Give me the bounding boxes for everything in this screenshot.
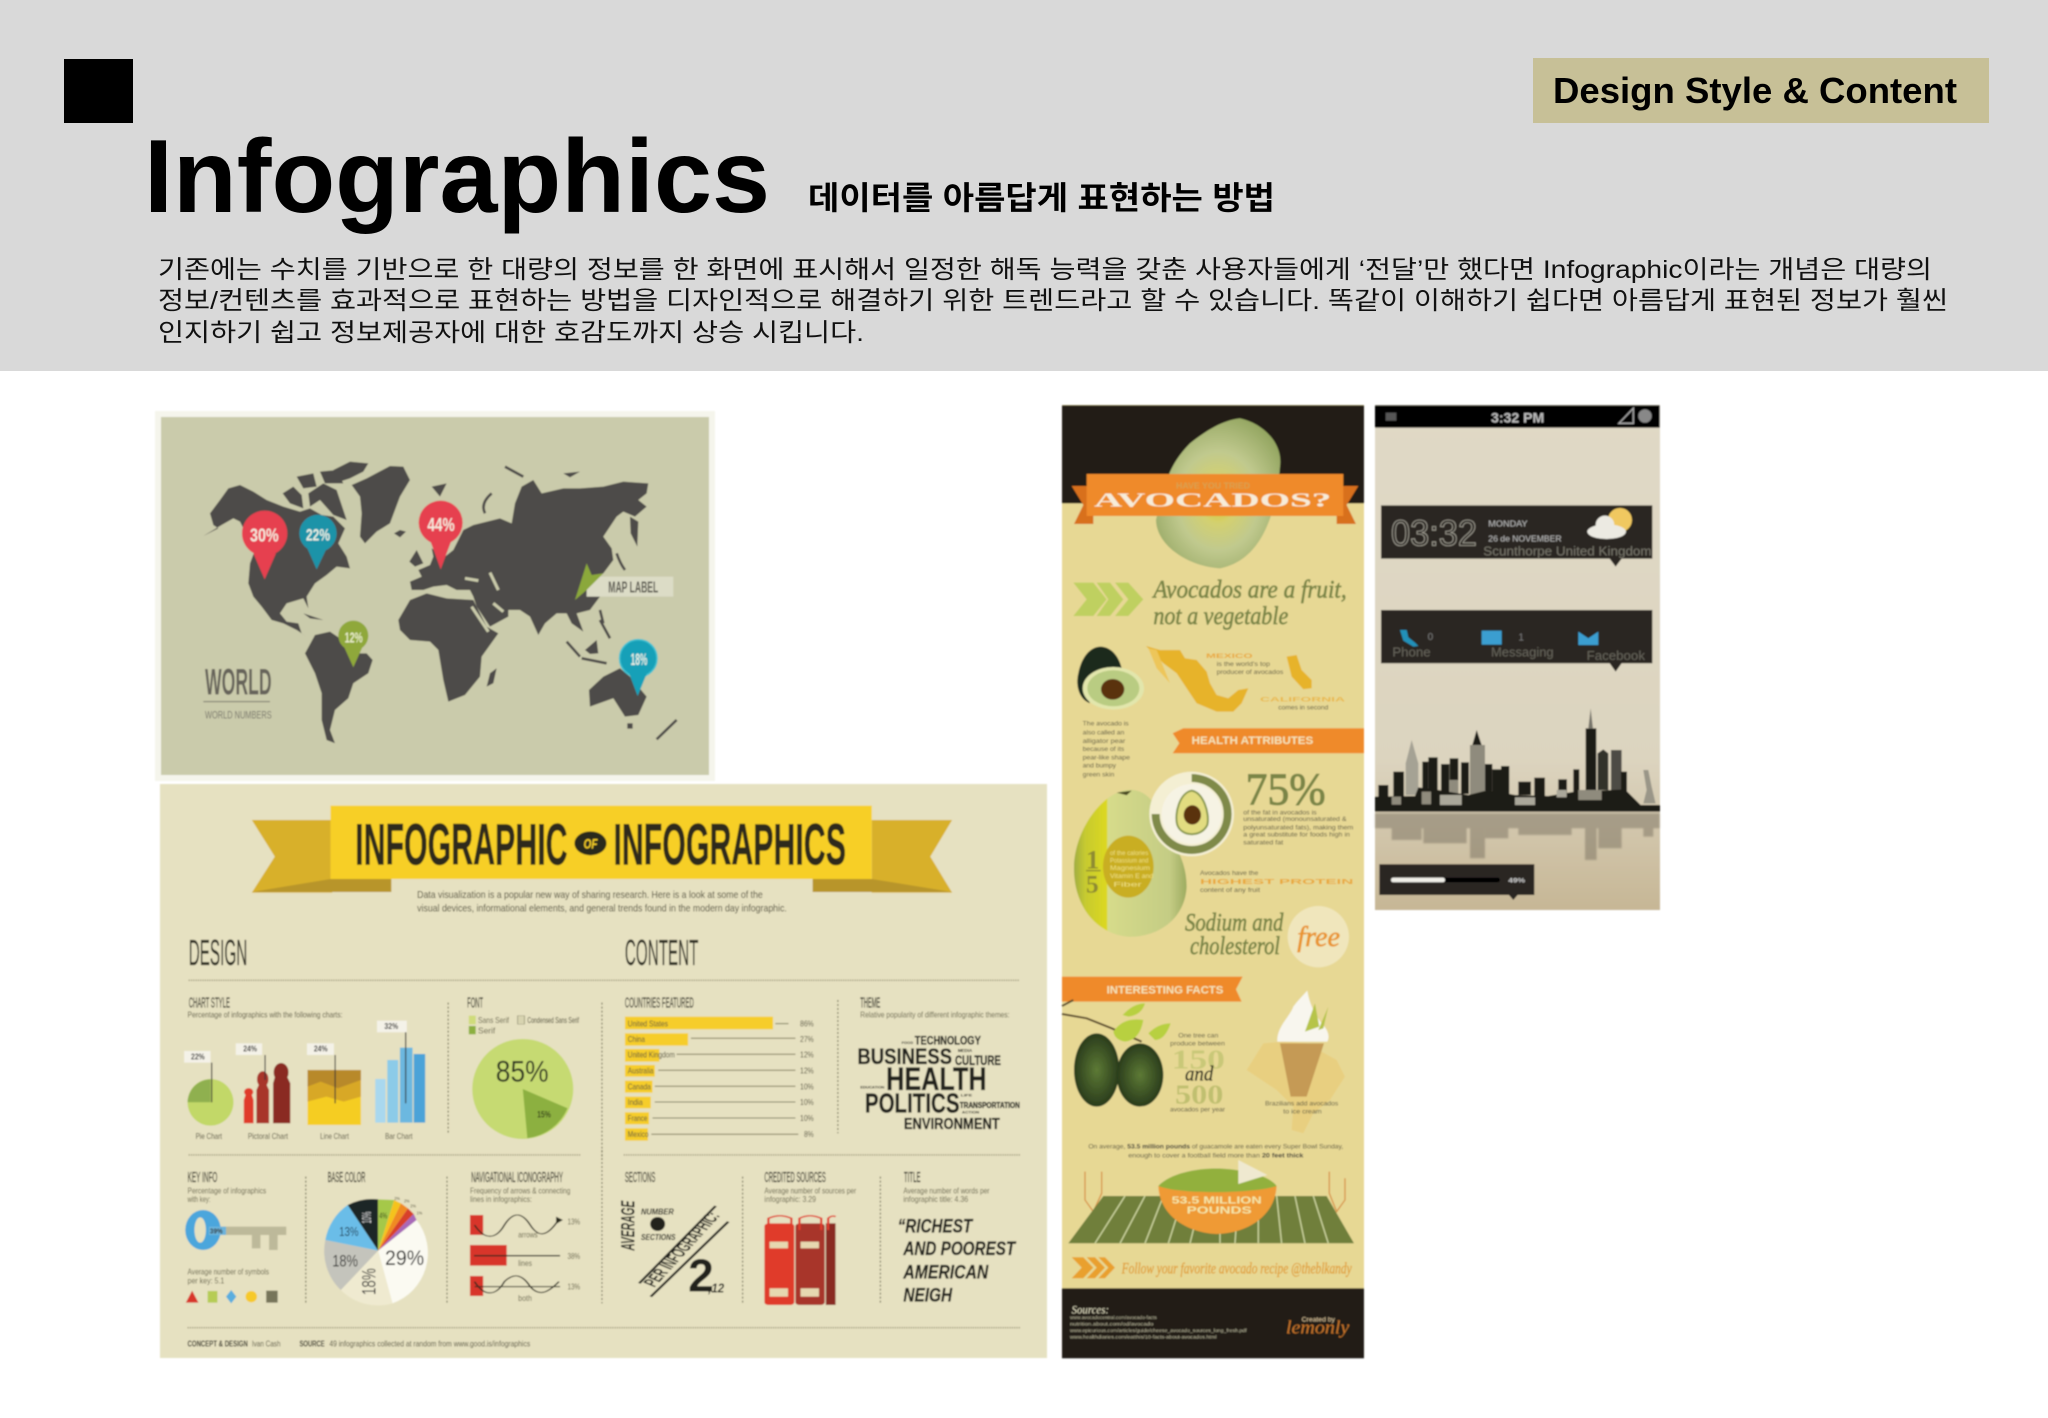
theme word cloud: ENVIRONMENT xyxy=(904,1115,1000,1133)
theme word cloud: POLITICS xyxy=(865,1088,960,1119)
key info block: Percentage of infographics xyxy=(188,1187,266,1195)
bar chart sample: Bar Chart xyxy=(385,1133,413,1141)
interesting facts banner: INTERESTING FACTS xyxy=(1107,985,1224,997)
dark avocado xyxy=(1077,647,1144,710)
ribbon banner: OF xyxy=(584,836,598,852)
avocados banner: AVOCADOS? xyxy=(1094,490,1331,512)
base color pie: 13% xyxy=(339,1224,359,1239)
75 percent ring xyxy=(1149,772,1234,856)
clock widget: 03:32 xyxy=(1391,512,1477,553)
sodium heading xyxy=(1185,909,1284,960)
panel: infographic of infographics: 38% xyxy=(568,1253,580,1261)
pie chart sample xyxy=(184,1051,233,1141)
intro text block: 인지하기 쉽고 정보제공자에 대한 호감도까지 상승 시킵니다. xyxy=(158,319,864,347)
75 percent text: unsaturated (monounsaturated & xyxy=(1243,817,1347,823)
shortcuts widget: Facebook xyxy=(1587,649,1646,663)
shortcuts widget: 0 xyxy=(1428,632,1434,643)
key info block: per key: 5.1 xyxy=(188,1277,224,1285)
base color pie: 2% xyxy=(404,1199,410,1204)
panel: infographic of infographics: Average number of sources per xyxy=(764,1187,856,1195)
theme word cloud: FOOD xyxy=(902,1041,913,1045)
avocado yield stats: avocados per year xyxy=(1170,1108,1225,1114)
countries featured bars: COUNTRIES FEATURED xyxy=(625,995,694,1011)
alligator pear note: also called an xyxy=(1083,730,1124,736)
pin 18% xyxy=(620,640,657,696)
panel: infographic of infographics: 13% xyxy=(568,1218,580,1227)
protein note: HIGHEST PROTEIN xyxy=(1200,877,1353,886)
big avocado slice: 5 xyxy=(1086,870,1099,898)
panel: infographic of infographics: NAVIGATIONAL ICONOGRAPHY xyxy=(471,1169,563,1186)
pie chart sample: 22% xyxy=(191,1053,205,1061)
title length block: NEIGH xyxy=(903,1284,953,1306)
theme word cloud: HEALTH xyxy=(886,1060,987,1097)
brazil and ice cream: Brazilians add avocados xyxy=(1265,1102,1338,1108)
countries featured bars: United States xyxy=(628,1020,668,1028)
navigational iconography block xyxy=(470,1169,580,1303)
pictorial chart sample xyxy=(236,1043,290,1141)
font pie chart: Sans Serif xyxy=(478,1017,510,1025)
status bar xyxy=(1375,405,1660,428)
countries featured bars: Mexico xyxy=(628,1131,648,1139)
panel: infographic of infographics: 12% xyxy=(800,1067,814,1076)
intro copy: visual devices, informational elements, and general trends found in the modern day infographic. xyxy=(417,902,787,913)
alligator pear note xyxy=(1083,722,1131,778)
header band xyxy=(0,0,2048,371)
big avocado slice: Potassium and xyxy=(1110,859,1148,865)
navigational iconography block: lines in infographics: xyxy=(470,1196,532,1204)
panel: infographic of infographics: AND POOREST xyxy=(903,1237,1017,1259)
big avocado slice: Magnesium xyxy=(1110,866,1150,872)
map label callout: MAP LABEL xyxy=(608,579,658,596)
panel: infographic of infographics: 10% xyxy=(800,1115,814,1123)
intro copy xyxy=(417,889,787,913)
footer credits: SOURCE xyxy=(299,1339,325,1349)
battery widget xyxy=(1379,864,1534,900)
title length block: Average number of words per xyxy=(903,1187,990,1195)
theme word cloud: TECHNOLOGY xyxy=(915,1034,981,1047)
avocado half xyxy=(1156,418,1280,568)
bar chart sample xyxy=(375,1021,425,1141)
avocados banner xyxy=(1072,474,1358,524)
world heading xyxy=(203,660,272,722)
clock widget: Scunthorpe United Kingdom xyxy=(1483,545,1652,559)
base color pie xyxy=(324,1169,428,1305)
line chart sample: 24% xyxy=(314,1045,328,1054)
panel: infographic of infographics: 12% xyxy=(800,1051,814,1060)
health attributes banner xyxy=(1173,728,1364,753)
dark footer with sources: www.avocadocentral.com/avocado-facts xyxy=(1070,1315,1157,1320)
clock widget xyxy=(1381,505,1652,567)
americas and greenland xyxy=(203,462,410,743)
theme word cloud: THEME xyxy=(860,995,880,1011)
pie chart sample: Pie Chart xyxy=(196,1133,222,1141)
super bowl fact: On average, 53.5 million pounds of guacamole are eaten every Super Bowl Sunday, xyxy=(1088,1145,1344,1151)
big avocado slice: Fiber xyxy=(1113,883,1142,889)
sections block: PER INFOGRAPHIC: xyxy=(639,1210,725,1289)
alligator pear note: because of its xyxy=(1083,747,1124,753)
big avocado slice: Vitamin E and xyxy=(1110,874,1153,880)
base color pie: 18% xyxy=(332,1252,358,1270)
panel: infographic of infographics: Condensed Sans Serif xyxy=(527,1017,579,1025)
avocado yield stats: 150 xyxy=(1172,1044,1225,1074)
base color pie: 29% xyxy=(385,1247,424,1270)
alligator pear note: and bumpy xyxy=(1083,764,1116,770)
clock widget: MONDAY xyxy=(1488,520,1528,529)
dark footer with sources: Sources: xyxy=(1072,1302,1109,1316)
city skyline xyxy=(1375,708,1660,812)
title length block: AMERICAN xyxy=(903,1261,989,1283)
mexico and california shapes: comes in second xyxy=(1278,705,1328,711)
panel: infographic of infographics: 10% xyxy=(800,1083,814,1091)
countries featured bars: China xyxy=(628,1036,645,1044)
base color pie: 10% xyxy=(361,1212,375,1223)
clock widget: 26 de NOVEMBER xyxy=(1488,535,1562,544)
shortcuts widget: Messaging xyxy=(1491,646,1554,660)
subtitle: 데이터를 아름답게 표현하는 방법 xyxy=(808,180,1275,216)
football field with guacamole bowl: POUNDS xyxy=(1187,1205,1252,1216)
intro text block: 정보/컨텐츠를 효과적으로 표현하는 방법을 디자인적으로 해결하기 위한 트렌드라고 할 수 있습니다. 똑같이 이해하기 쉽다면 아름답게 표현된 정보가 훨씬 xyxy=(158,287,1948,315)
countries featured bars: France xyxy=(628,1115,647,1123)
shortcuts widget: 1 xyxy=(1518,633,1524,644)
football field with guacamole bowl xyxy=(1068,1160,1354,1243)
font pie chart: 15% xyxy=(537,1109,551,1120)
alligator pear note: The avocado is xyxy=(1083,722,1129,728)
panel: infographic of infographics: CONTENT xyxy=(625,932,698,973)
brazil and ice cream xyxy=(1247,991,1345,1133)
free badge: free xyxy=(1297,922,1340,953)
pin 44% xyxy=(419,501,463,569)
dark footer with sources: Created by xyxy=(1302,1317,1336,1324)
footer credits: CONCEPT & DESIGN xyxy=(188,1339,248,1349)
football field with guacamole bowl: 53.5 MILLION xyxy=(1172,1195,1262,1206)
follow line: Follow your favorite avocado recipe @theblkandy xyxy=(1121,1260,1352,1277)
panel: infographic of infographics: 8% xyxy=(804,1131,814,1139)
panel: world map: WORLD xyxy=(205,660,272,702)
sections block: AVERAGE xyxy=(619,1200,640,1251)
pin 30% xyxy=(242,511,287,579)
panel: infographic of infographics: 49 infographics collected at random from www.good.is/infographics xyxy=(329,1339,530,1349)
title length block: infographic title: 4.36 xyxy=(903,1196,968,1204)
key info block xyxy=(185,1169,286,1303)
dark footer with sources: nutrition.about.com/od/avocado xyxy=(1070,1322,1154,1327)
pin 12% xyxy=(338,621,368,667)
section headings: DESIGN xyxy=(189,932,247,973)
protein note xyxy=(1200,871,1353,894)
panel: avocados xyxy=(1062,405,1364,1358)
panel: infographic of infographics xyxy=(160,784,1047,1358)
avocados banner: HAVE YOU TRIED xyxy=(1176,480,1250,490)
inland seas xyxy=(423,573,503,632)
panel: infographic of infographics: TRANSPORTATION xyxy=(960,1100,1020,1110)
sections block xyxy=(619,1169,728,1302)
theme word cloud: EDUCATION xyxy=(860,1086,884,1090)
base color pie: 4% xyxy=(379,1212,387,1220)
title: Infographics xyxy=(144,119,770,235)
chart style block: CHART STYLE xyxy=(189,995,230,1011)
75 percent text: of the fat in avocados is xyxy=(1243,810,1317,816)
base color pie: 1% xyxy=(417,1211,422,1216)
bar chart sample: 32% xyxy=(384,1023,398,1031)
mexico and california shapes: producer of avocados xyxy=(1217,670,1283,676)
pictorial chart sample: 24% xyxy=(243,1045,257,1054)
green chevrons xyxy=(1073,583,1143,616)
base color pie: 2% xyxy=(394,1196,400,1201)
super bowl fact xyxy=(1088,1145,1344,1160)
black square marker xyxy=(64,59,133,123)
line chart sample xyxy=(307,1043,361,1141)
theme word cloud: BUSINESS xyxy=(857,1044,952,1069)
theme word cloud: LIFE xyxy=(961,1094,972,1098)
script heading: fruit: Avocados are a fruit, xyxy=(1151,575,1347,603)
big avocado slice: 1 xyxy=(1086,844,1099,874)
intro text block: 기존에는 수치를 기반으로 한 대량의 정보를 한 화면에 표시해서 일정한 해독 능력을 갖춘 사용자들에게 ‘전달’만 했다면 Infographic이라는 개념은 대량의 xyxy=(158,256,1932,284)
countries featured bars: Canada xyxy=(628,1083,651,1091)
credited sources block: infographic: 3.29 xyxy=(764,1196,816,1204)
protein note: content of any fruit xyxy=(1200,888,1260,894)
countries featured bars xyxy=(625,995,814,1141)
base color pie: 2% xyxy=(410,1204,416,1209)
sections block: SECTIONS xyxy=(641,1234,676,1242)
key info block: KEY INFO xyxy=(188,1169,217,1186)
font pie chart: 85% xyxy=(496,1055,549,1088)
panel: infographic of infographics: CREDITED SOURCES xyxy=(764,1169,826,1186)
interesting facts banner xyxy=(1062,977,1243,1002)
map label callout xyxy=(575,563,673,600)
theme word cloud: ACTION xyxy=(962,1110,979,1115)
dark footer with sources: lemonly xyxy=(1286,1317,1350,1338)
sections block: ,12 xyxy=(708,1281,725,1295)
battery widget: 49% xyxy=(1508,877,1525,884)
section headings xyxy=(189,932,698,973)
sections block: NUMBER xyxy=(641,1208,674,1216)
base color pie: 18% xyxy=(359,1268,380,1295)
theme word cloud: CULTURE xyxy=(955,1053,1001,1069)
navigational iconography block: lines xyxy=(518,1260,532,1268)
title length block: “RICHEST xyxy=(898,1215,974,1237)
avocado yield stats: One tree can xyxy=(1178,1034,1218,1040)
key info block: Average number of symbols xyxy=(188,1268,269,1276)
ribbon banner: INFOGRAPHIC xyxy=(355,813,568,877)
pin 22%: 22% xyxy=(306,526,330,545)
dark footer with sources xyxy=(1062,1288,1364,1358)
mexico and california shapes: CALIFORNIA xyxy=(1260,697,1345,704)
chart style block xyxy=(184,995,425,1141)
alligator pear note: pear-like shape xyxy=(1083,756,1131,762)
countries featured bars: United Kingdom xyxy=(628,1051,675,1060)
alligator pear note: alligator pear xyxy=(1083,739,1125,745)
free badge xyxy=(1288,906,1349,967)
icon: phone xyxy=(1400,630,1418,647)
pin 22% xyxy=(299,515,337,569)
font pie chart: FONT xyxy=(467,995,483,1011)
theme word cloud: MEDIA xyxy=(958,1048,972,1053)
panel: infographic of infographics: INFOGRAPHICS xyxy=(613,813,846,877)
script heading: fruit: not a vegetable xyxy=(1153,602,1288,630)
theme word cloud: Relative popularity of different infographic themes: xyxy=(860,1011,1010,1020)
dark footer with sources: www.healthdiaries.com/eatthis/10-facts-about-avocados.html xyxy=(1070,1334,1217,1339)
navigational iconography block: arrows xyxy=(518,1231,538,1239)
countries featured bars: Australia xyxy=(628,1067,654,1076)
sodium heading: Sodium and xyxy=(1185,909,1284,937)
reflection of skyline xyxy=(1375,813,1660,860)
title length block: TITLE xyxy=(904,1169,921,1186)
badge: Design Style & Content: Design Style & Content xyxy=(1553,70,1957,111)
75 percent text: polyunsaturated fats), making them xyxy=(1243,825,1353,831)
icon: sun and cloud xyxy=(1587,508,1632,539)
shortcuts widget: Phone xyxy=(1392,646,1431,660)
sections block: 2 xyxy=(688,1250,714,1302)
panel: phone screen xyxy=(1375,405,1660,910)
footer credits: Ivan Cash xyxy=(252,1339,281,1349)
panel: infographic of infographics: 86% xyxy=(800,1020,814,1028)
big avocado slice: of the calories xyxy=(1110,851,1148,857)
75 percent text: 75% xyxy=(1246,764,1326,814)
pin 12%: 12% xyxy=(345,631,363,647)
sections block: SECTIONS xyxy=(625,1169,655,1186)
eurasia africa australia xyxy=(394,472,648,729)
script heading: fruit xyxy=(1151,575,1347,630)
navigational iconography block: both xyxy=(518,1295,532,1303)
mexico and california shapes: is the world's top xyxy=(1217,662,1271,668)
protein note: Avocados have the xyxy=(1200,871,1259,877)
mexico and california shapes xyxy=(1146,646,1345,712)
big avocado slice xyxy=(1074,790,1187,937)
panel: world map xyxy=(155,411,715,781)
panel: infographic of infographics: 27% xyxy=(800,1036,814,1044)
pictorial chart sample: Pictoral Chart xyxy=(248,1133,289,1141)
avocado yield stats: produce between xyxy=(1170,1042,1225,1048)
intro copy: Data visualization is a popular new way of sharing research. Here is a look at some of the xyxy=(417,889,763,900)
world heading: WORLD NUMBERS xyxy=(205,710,272,722)
alligator pear note: green skin xyxy=(1083,772,1114,778)
orange chevrons xyxy=(1072,1257,1115,1278)
shortcuts widget xyxy=(1381,610,1652,672)
font pie chart xyxy=(467,995,579,1139)
key info block: 39% xyxy=(210,1228,223,1235)
pin 30%: 30% xyxy=(250,525,279,546)
health attributes banner: HEALTH ATTRIBUTES xyxy=(1192,735,1314,747)
panel: infographic of infographics: 13% xyxy=(568,1283,580,1292)
pin 44%: 44% xyxy=(427,514,455,535)
navigational iconography block: Frequency of arrows & connecting xyxy=(470,1187,570,1195)
75 percent text: a great substitute for foods high in xyxy=(1243,833,1350,839)
title length block xyxy=(898,1169,1017,1306)
countries featured bars: India xyxy=(628,1099,643,1107)
75 percent text xyxy=(1243,764,1353,847)
avocados on branch xyxy=(1062,1000,1171,1107)
credited sources block xyxy=(764,1169,856,1305)
base color pie: BASE COLOR xyxy=(328,1169,365,1186)
badge: Design Style & Content xyxy=(1533,58,1989,123)
font pie chart: Serif xyxy=(478,1027,496,1035)
sodium heading: cholesterol xyxy=(1190,932,1280,960)
line chart sample: Line Chart xyxy=(320,1133,349,1141)
footer credits xyxy=(188,1339,530,1349)
pin 18%: 18% xyxy=(631,650,647,669)
key info block: with key: xyxy=(187,1196,211,1204)
avocado yield stats: 500 xyxy=(1175,1079,1223,1109)
icon: message xyxy=(1482,631,1502,645)
mexico and california shapes: MEXICO xyxy=(1206,653,1253,660)
theme word cloud xyxy=(857,995,1020,1133)
intro text block xyxy=(158,256,1948,347)
icon: mail xyxy=(1578,632,1598,645)
panel: infographic of infographics: 10% xyxy=(800,1099,814,1107)
75 percent text: saturated fat xyxy=(1243,841,1284,847)
chart style block: Percentage of infographics with the following charts: xyxy=(188,1011,343,1020)
avocado yield stats xyxy=(1170,1034,1225,1114)
dark footer with sources: www.epicurious.com/articles/guide/cheese_avocado_sources_long_fresh.pdf xyxy=(1070,1328,1247,1333)
avocado yield stats: and xyxy=(1185,1064,1214,1086)
status bar: 3:32 PM xyxy=(1491,410,1544,426)
ribbon banner xyxy=(252,806,952,893)
super bowl fact: enough to cover a football field more than 20 feet thick xyxy=(1128,1154,1304,1160)
brazil and ice cream: to ice cream xyxy=(1283,1110,1322,1116)
